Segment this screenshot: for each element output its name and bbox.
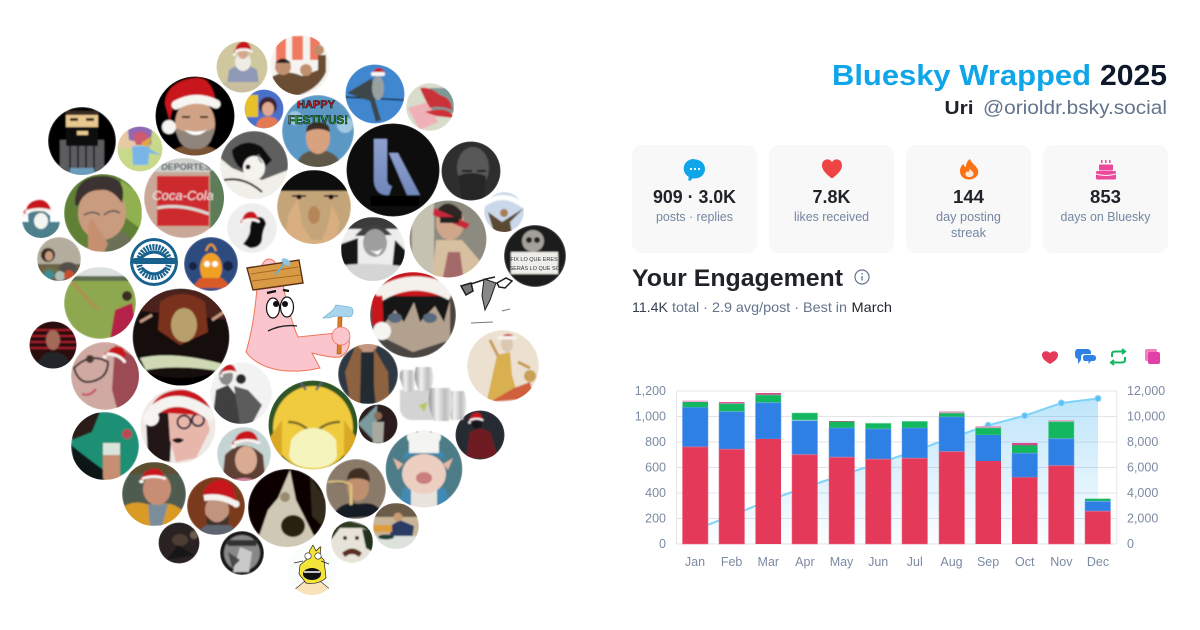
bar: jan (682, 400, 708, 544)
panel: likes received (769, 145, 894, 253)
stat: days: 853 (1090, 187, 1121, 207)
avatar: coca-cola bar sign: DEPORTES (161, 162, 211, 172)
wooden sign with nail (247, 257, 303, 290)
right axis labels: 2,000 (1127, 512, 1158, 526)
stat label (936, 210, 1001, 240)
avatar: old man with santa hat (216, 41, 268, 94)
left axis labels: 1,000 (635, 410, 666, 424)
left axis labels: 0 (659, 537, 666, 551)
user name and handle: Uri (944, 97, 974, 118)
right axis labels: 10,000 (1127, 410, 1165, 424)
month labels: Sep (977, 555, 999, 569)
avatar: bald man with santa hat (187, 477, 245, 535)
avatar: girl covering face (277, 170, 351, 246)
legend: quotes squares (1145, 349, 1160, 364)
avatar: small teal figure with santa hat (22, 200, 60, 240)
patrick body (246, 259, 349, 371)
avatar: person swinging on lawn (64, 267, 136, 340)
avatar: happy festivus george (282, 95, 354, 168)
avatar: cartoon woman with black hair (220, 131, 288, 200)
avatar: laughing man logo (132, 240, 177, 284)
avatar: bluey cartoon dog (117, 126, 163, 172)
title: bluesky wrapped 2025: 2025 (1100, 60, 1167, 92)
chart grid (676, 391, 1117, 544)
avatar: person in sky (484, 192, 524, 233)
avatar: illustrated woman with santa hat (140, 388, 216, 464)
avatar: medieval manuscript (467, 330, 539, 402)
panel: days on bluesky (1043, 145, 1168, 253)
avatar: psyduck plush (268, 380, 358, 470)
avatar: homer cartoon (287, 545, 337, 596)
month labels: Apr (795, 555, 815, 569)
stat label: days on Bluesky (1060, 210, 1151, 224)
left axis labels (635, 384, 666, 551)
avatar: cartoon dark haired figure (358, 404, 398, 444)
month labels: Jan (685, 555, 705, 569)
avatar: man with red stripes (29, 321, 77, 370)
stat label: posts · replies (656, 210, 733, 224)
icon: flame (960, 159, 978, 180)
avatar: black and white embrace (220, 531, 264, 575)
avatar: smiling woman with santa hat (217, 427, 271, 484)
avatar: moustached cowboy (331, 521, 373, 563)
right axis labels (1127, 384, 1165, 551)
avatar: family on couch (37, 237, 81, 282)
legend icons (1042, 349, 1160, 365)
right axis labels: 4,000 (1127, 486, 1158, 500)
bar: nov (1048, 420, 1074, 544)
heading: your engagement: Your Engagement (632, 265, 843, 292)
avatar: happy festivus george: HAPPY (297, 99, 336, 111)
month labels: Jul (907, 555, 923, 569)
legend: likes heart (1042, 351, 1058, 364)
avatar: man eating noodles (326, 459, 386, 519)
cumulative area (695, 399, 1098, 544)
avatar: yellow bird character (184, 237, 238, 291)
chart: monthly engagement (635, 384, 1165, 569)
illustration: silver cups (400, 367, 466, 421)
month labels: Mar (758, 555, 779, 569)
month labels: Feb (721, 555, 742, 569)
icon: heart (822, 159, 842, 178)
engagement summary: March (852, 299, 892, 315)
avatar: skull with sign: Y SERÁS LO QUE SOY (504, 265, 564, 272)
avatar: woman with red headband (409, 200, 487, 282)
avatar: woman with long hair (338, 344, 398, 404)
left axis labels: 400 (645, 486, 666, 500)
avatar: sepia bearded man (441, 141, 501, 201)
avatar: anime boy with santa hat (370, 272, 456, 358)
cumulative line (695, 396, 1101, 530)
avatar: red haired mermaid comic (406, 83, 454, 131)
month labels: Dec (1087, 555, 1109, 569)
bar: mar (756, 393, 781, 544)
avatar: cartoon woman with bookshelf (244, 89, 284, 129)
avatar: wedding photo (248, 469, 326, 548)
avatar: pig chef (386, 428, 462, 510)
left axis labels: 800 (645, 435, 666, 449)
month labels: Aug (940, 555, 963, 569)
avatar: man in orange jacket (122, 462, 186, 526)
month labels: Oct (1015, 555, 1035, 569)
title: bluesky wrapped 2025: Bluesky Wrapped (832, 60, 1091, 92)
panel: day posting streak (906, 145, 1031, 253)
avatar: dark logo (346, 123, 440, 217)
user name and handle: @orioldr.bsky.social (983, 98, 1167, 119)
engagement summary: total · 2.9 avg/post · Best in (672, 299, 847, 315)
avatar: dark warrior with santa hat (455, 410, 505, 460)
avatar: smiling man with santa hat (155, 76, 235, 160)
patrick eyes and mouth (266, 290, 297, 331)
avatar: silhouette with santa hat (227, 203, 277, 253)
stat: posts replies: 909 · 3.0K (653, 187, 736, 207)
left axis labels: 200 (645, 512, 666, 526)
bar: may (829, 421, 854, 544)
month labels (685, 555, 1109, 569)
avatar: skull with sign (504, 225, 566, 287)
bar: feb (719, 402, 744, 544)
avatar: men at protest raising fist (270, 35, 330, 96)
stat label: day posting (936, 210, 1001, 224)
right axis labels: 0 (1127, 537, 1134, 551)
icon: birthday cake (1096, 160, 1116, 180)
bar: apr (792, 413, 818, 544)
stat label: streak (951, 226, 987, 240)
avatar: dark moody scene (158, 522, 200, 564)
bar: aug (939, 411, 964, 544)
avatar: woman with red hair and glasses (71, 342, 140, 412)
avatar: happy festivus george: FESTIVUS! (288, 115, 348, 127)
stat label: likes received (794, 210, 869, 224)
avatar: man in restaurant (373, 503, 419, 549)
left axis labels: 1,200 (635, 384, 666, 398)
bar: oct (1012, 443, 1038, 544)
panel: posts and replies (632, 145, 757, 253)
legend: replies bubbles (1075, 349, 1096, 364)
month labels: May (830, 555, 854, 569)
avatar: pixel art bearded man (48, 107, 116, 176)
bar: dec (1085, 499, 1110, 544)
right axis labels: 6,000 (1127, 460, 1158, 474)
avatar: black and white couple (210, 362, 272, 424)
illustration: sketched sunglasses (461, 277, 512, 323)
left axis labels: 600 (645, 460, 666, 474)
month labels: Jun (868, 555, 888, 569)
engagement summary (632, 299, 892, 315)
avatar: coca-cola bar sign: Coca-Cola (152, 188, 214, 203)
month labels: Nov (1050, 555, 1073, 569)
icon: chat bubble (684, 159, 705, 181)
bar: jun (866, 423, 891, 544)
engagement summary: 11.4K (632, 299, 669, 315)
stacked bars (682, 393, 1110, 544)
right axis labels: 8,000 (1127, 435, 1158, 449)
avatar: bird on a wire (345, 64, 405, 124)
icon: info (855, 270, 869, 284)
illustration: patrick star with sign and hammer (246, 257, 353, 371)
avatar: witch with cauldron (132, 288, 230, 388)
stat: likes: 7.8K (812, 187, 850, 207)
panel: avatar bubble cluster (22, 35, 566, 596)
bar: sep (976, 426, 1001, 544)
hammer (323, 305, 353, 354)
avatar: skull with sign: FIX LO QUE ERES (510, 257, 558, 263)
avatar: black and white smiling man (341, 217, 405, 282)
stat: streak: 144 (953, 187, 984, 207)
bar: jul (902, 421, 928, 544)
avatar: green shirt holding cup (71, 412, 139, 480)
right axis labels: 12,000 (1127, 384, 1165, 398)
legend: reposts arrows (1111, 349, 1125, 365)
avatar: coca-cola bar sign (144, 158, 226, 238)
avatar: man with glasses rubbing eye (64, 174, 142, 252)
